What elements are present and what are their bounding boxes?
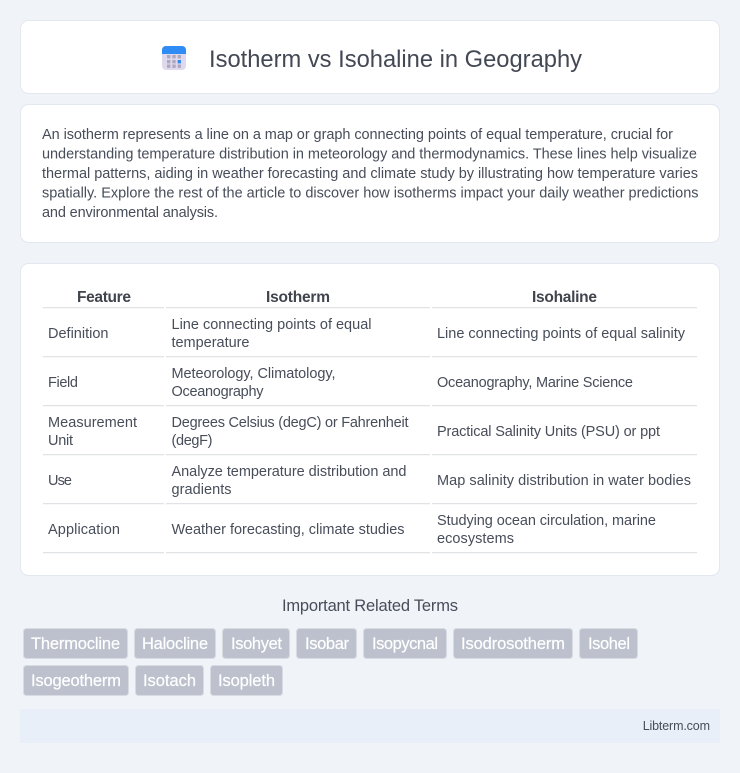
tag: Isobar: Isobar xyxy=(305,635,350,653)
footer xyxy=(20,709,720,743)
row: application: ecosystems xyxy=(437,531,514,547)
tag: Isohel xyxy=(580,628,638,658)
table header: Isohaline xyxy=(532,289,597,306)
row: definition: Line connecting points of equal xyxy=(172,317,372,333)
related term tags xyxy=(24,628,638,696)
title: Isotherm vs Isohaline in Geography xyxy=(209,46,583,73)
tag: Isopycnal: Isopycnal xyxy=(372,635,438,653)
tag: Isotach: Isotach xyxy=(143,672,196,690)
tag: Isopleth xyxy=(210,666,282,696)
tag: Halocline: Halocline xyxy=(142,635,208,653)
heading: important related terms: Important Related Terms xyxy=(282,597,458,615)
tag: Halocline xyxy=(134,628,216,658)
tag: Isotach xyxy=(136,666,204,696)
tag: Isohel: Isohel xyxy=(588,635,630,653)
intro paragraph xyxy=(42,127,698,221)
row: field xyxy=(48,366,633,400)
tag: Isodrosotherm xyxy=(454,628,572,658)
row: application: Studying ocean circulation, marine xyxy=(437,513,656,529)
row: measurement unit: Practical Salinity Units (PSU) or ppt xyxy=(437,424,660,440)
row: use: Map salinity distribution in water bodies xyxy=(437,473,691,489)
row: application xyxy=(48,513,656,547)
tag: Thermocline xyxy=(24,628,128,658)
row: definition: temperature xyxy=(172,335,250,351)
panel: comparison table xyxy=(20,264,720,576)
tag: Isopleth: Isopleth xyxy=(218,672,275,690)
row: use: gradients xyxy=(172,482,232,498)
tag: Thermocline: Thermocline xyxy=(31,635,120,653)
intro paragraph: thermal patterns, aiding in weather forecasting and climate study by illustrating how temperature varies xyxy=(42,166,698,182)
table header xyxy=(77,289,597,306)
tag: Isogeotherm xyxy=(24,666,128,696)
row: field: Meteorology, Climatology, xyxy=(172,366,336,382)
tag: Isohyet xyxy=(222,628,290,658)
row: measurement unit: Unit xyxy=(48,433,73,449)
row: definition: Definition xyxy=(48,326,108,342)
row: measurement unit: Degrees Celsius (degC) or Fahrenheit xyxy=(172,415,408,431)
intro paragraph: spatially. Explore the rest of the article to discover how isotherms impact your daily weather predictions xyxy=(42,186,698,202)
row: field: Field xyxy=(48,375,78,391)
tag: Isohyet: Isohyet xyxy=(231,635,282,653)
tag: Isodrosotherm: Isodrosotherm xyxy=(461,635,565,653)
intro paragraph: An isotherm represents a line on a map or graph connecting points of equal temperature, crucial for xyxy=(42,127,673,143)
footer: Libterm.com xyxy=(643,719,710,733)
row: measurement unit: (degF) xyxy=(172,433,212,449)
row: use: Analyze temperature distribution and xyxy=(172,464,406,480)
table header: Feature xyxy=(77,289,131,306)
tag: Isopycnal xyxy=(364,628,446,658)
tag: Isogeotherm: Isogeotherm xyxy=(31,672,121,690)
row: application: Application xyxy=(48,522,120,538)
tag: Isobar xyxy=(296,628,356,658)
row: application: Weather forecasting, climate studies xyxy=(172,522,404,538)
row: definition: Line connecting points of equal salinity xyxy=(437,326,686,342)
icon: calendar xyxy=(162,46,186,70)
row: use: Use xyxy=(48,473,72,489)
row: definition xyxy=(48,317,686,351)
panel: header xyxy=(20,20,720,94)
panel: introduction xyxy=(20,104,720,242)
row: field: Oceanography, Marine Science xyxy=(437,375,633,391)
table header: Isotherm xyxy=(266,289,330,306)
row: measurement unit xyxy=(48,415,660,449)
row: field: Oceanography xyxy=(172,384,264,400)
intro paragraph: understanding temperature distribution in meteorology and thermodynamics. These lines help visualize xyxy=(42,146,697,162)
row: measurement unit: Measurement xyxy=(48,415,137,431)
intro paragraph: and environmental analysis. xyxy=(42,205,218,221)
row: use xyxy=(48,464,691,498)
